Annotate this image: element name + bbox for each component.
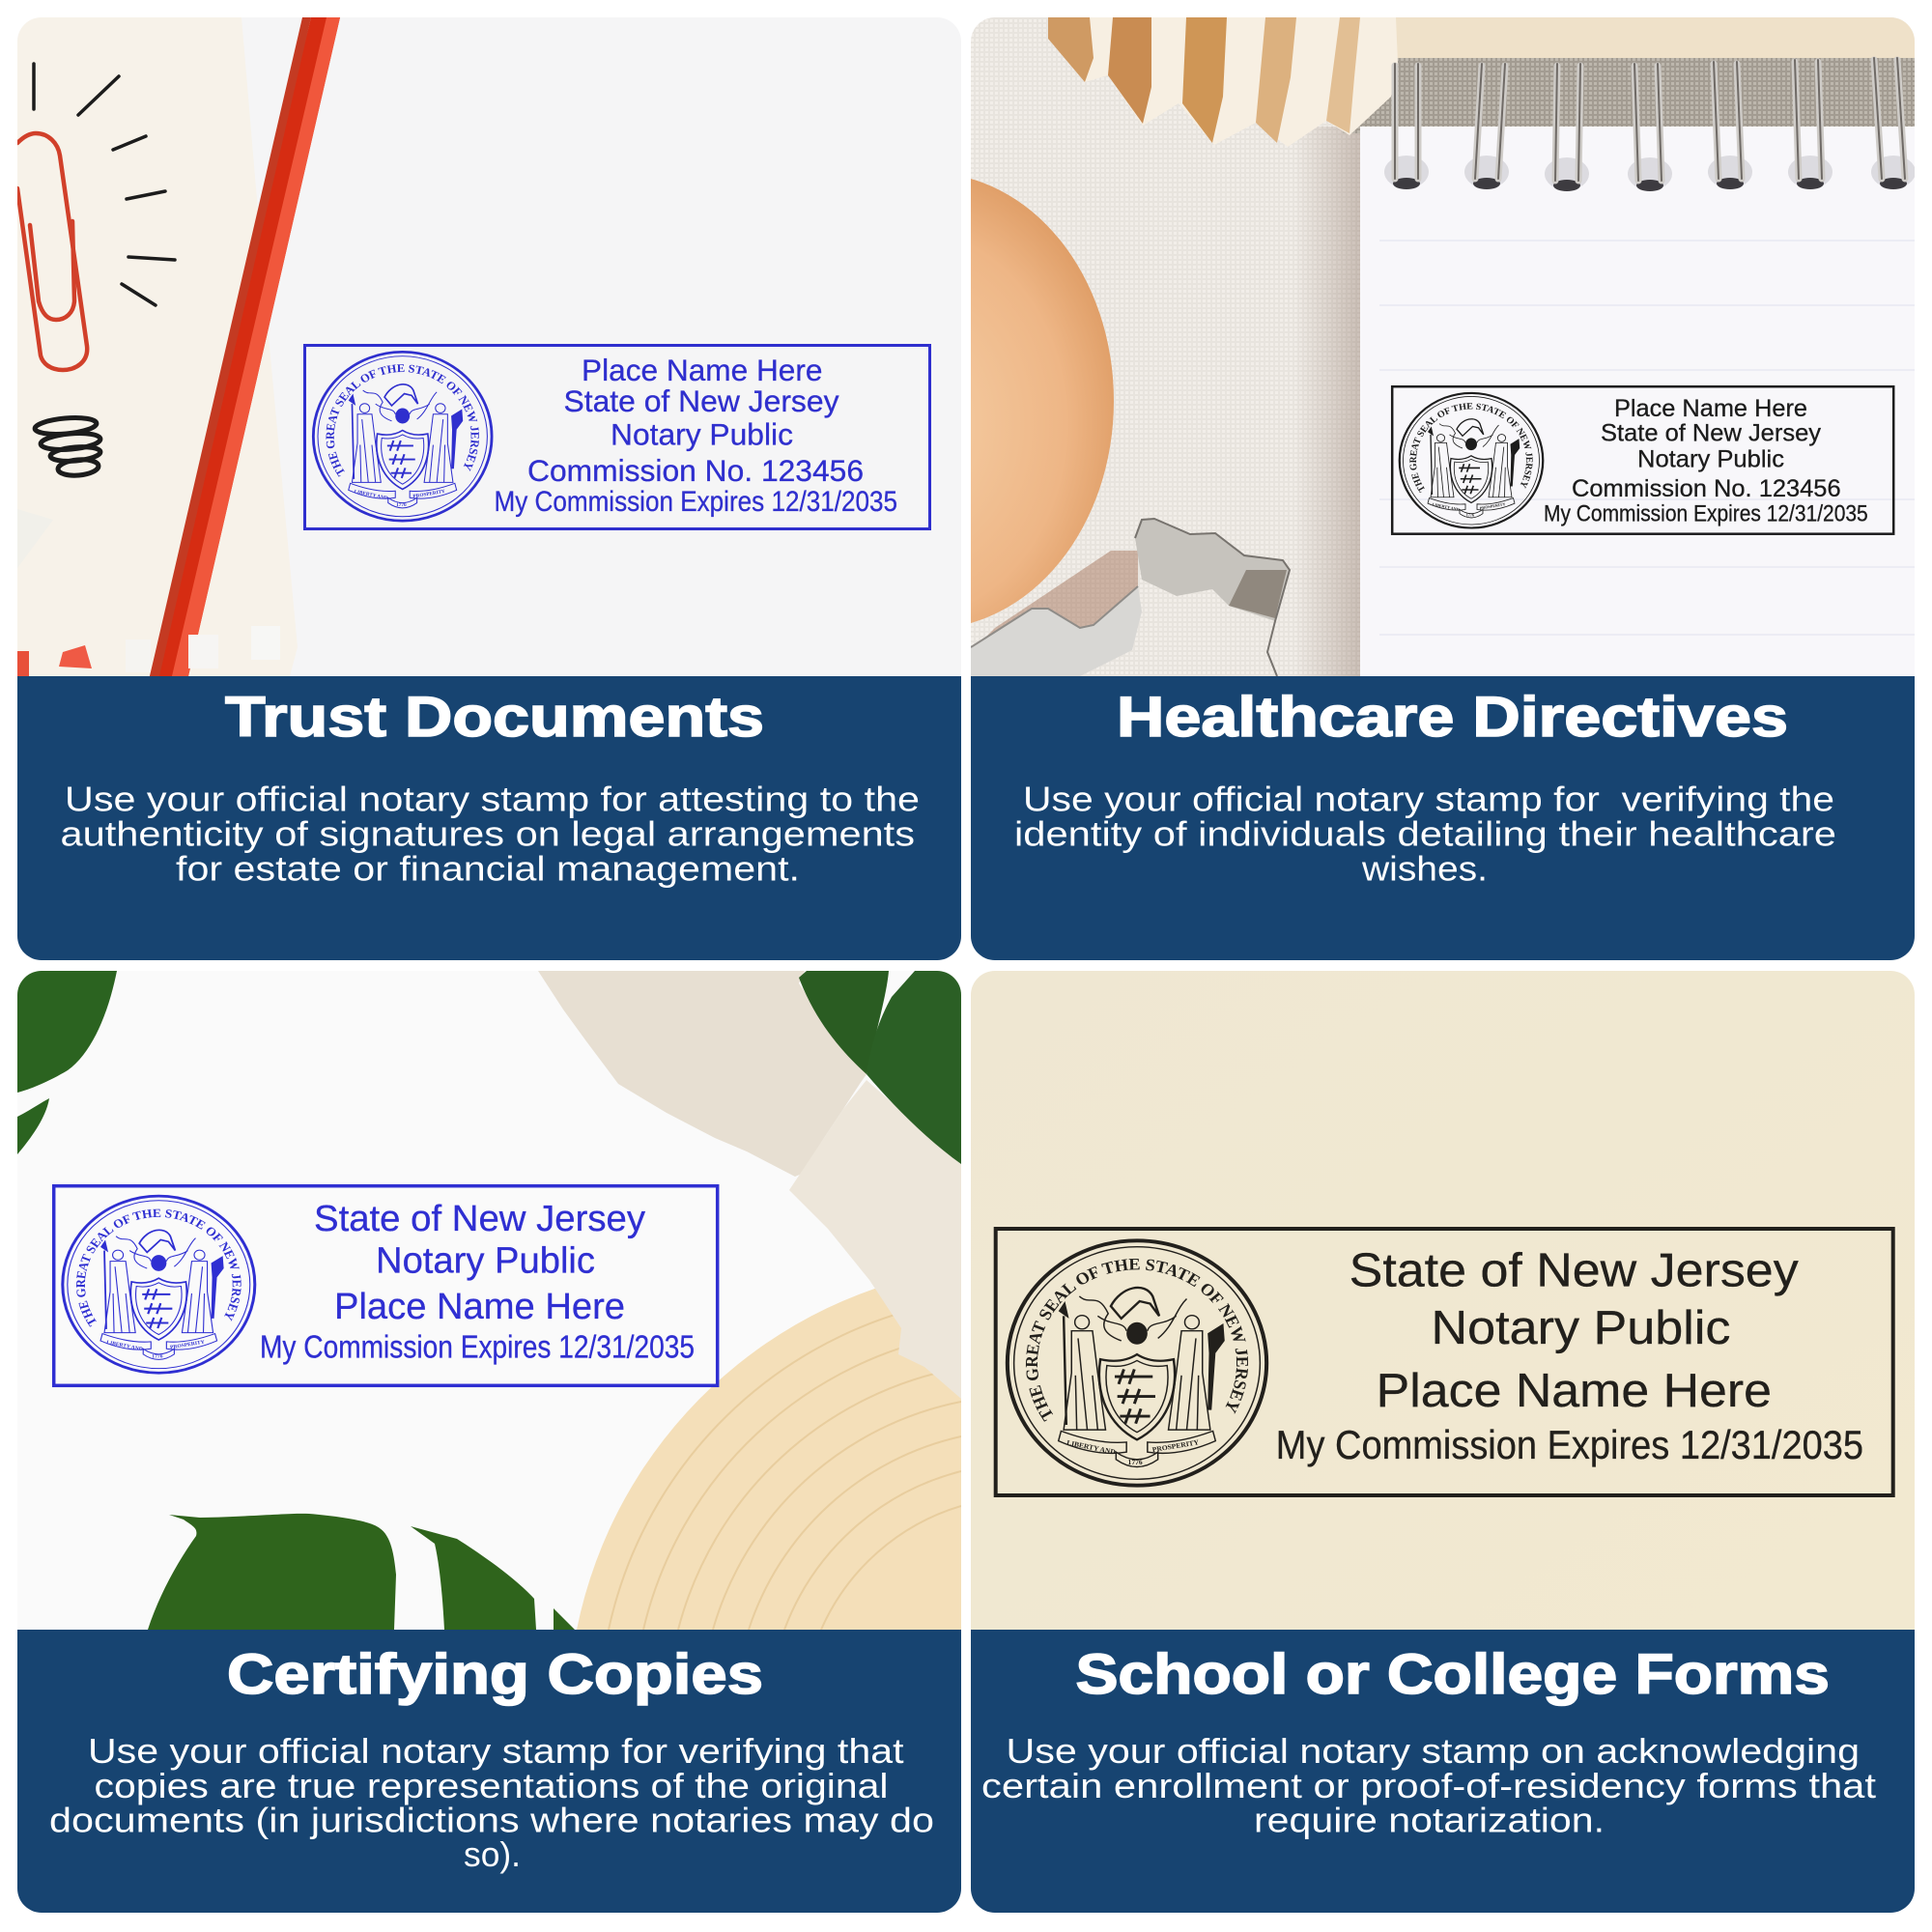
seal of New Jersey: 1776 [152,1354,163,1359]
stamp text: Notary Public [1432,1302,1731,1354]
icon: spiral rings [1384,58,1916,191]
description: require notarization. [1254,1801,1605,1839]
icon: notebook page [1360,127,1915,676]
panel: Healthcare Directives [971,17,1915,960]
description: documents (in jurisdictions where notaries may do [49,1801,934,1839]
stamp text: My Commission Expires 12/31/2035 [495,486,897,518]
photo: cream textured paper [971,971,1915,1630]
stamp text [260,1199,695,1365]
seal of New Jersey [1399,392,1544,529]
icon: wooden handle [1391,17,1915,58]
photo: leaves, linen cloth and straw hat [17,971,961,1630]
stamp impression: black New Jersey notary stamp [993,1227,1895,1497]
stamp text: My Commission Expires 12/31/2035 [1276,1422,1863,1467]
panel: School or College Forms [971,971,1915,1913]
description: Use your official notary stamp on acknowledging [1007,1731,1860,1771]
stamp text: Place Name Here [582,353,823,387]
heading: School or College Forms [1076,1643,1830,1706]
seal of New Jersey: LIBERTY AND [354,489,388,501]
stamp text: Place Name Here [1377,1365,1772,1417]
icon: honey dipper [1048,17,1398,147]
stamp text: Place Name Here [334,1287,625,1327]
seal of New Jersey: THE GREAT SEAL OF THE STATE OF NEW JERSEY [1026,1259,1248,1422]
caption band [17,1630,961,1913]
stamp impression: black New Jersey notary stamp [1391,384,1895,535]
stamp text [1276,1245,1863,1467]
heading: Trust Documents [225,686,764,749]
stamp text: Commission No. 123456 [1572,475,1841,502]
icon: paper clip [17,133,87,370]
seal of New Jersey: LIBERTY AND [1432,501,1460,512]
photo: paper, pencil and paper clip [17,17,961,676]
seal of New Jersey: LIBERTY AND [106,1340,143,1352]
linen stain near egg [985,551,1138,638]
seal of New Jersey [61,1194,257,1375]
icon: linen cloth [538,971,961,1399]
description: wishes. [1361,848,1488,889]
photo: linen, egg, honey dipper, notebook, cookie cutter [971,17,1915,676]
heading: Certifying Copies [227,1643,763,1706]
stamp text [495,353,897,518]
caption band [971,1630,1915,1913]
description: Use your official notary stamp for verifying the [1023,779,1834,819]
icon: hand-drawn light bulb rays and base [34,64,175,477]
seal of New Jersey: PROSPERITY [1479,501,1506,510]
seal of New Jersey: THE GREAT SEAL OF THE STATE OF NEW JERSEY [76,1209,242,1327]
icon: cookie cutter [971,519,1290,676]
description: for estate or financial management. [176,848,800,889]
icon: monstera leaves top left [17,971,117,1154]
description: identity of individuals detailing their healthcare [1014,813,1836,854]
stamp text: Notary Public [611,417,793,452]
seal of New Jersey: LIBERTY AND [1065,1438,1117,1456]
caption band [17,676,961,960]
seal of New Jersey: PROSPERITY [170,1340,205,1350]
seal of New Jersey [311,351,493,522]
icon: red pencil [150,17,340,676]
description: so). [464,1834,521,1874]
seal of New Jersey: 1776 [1466,513,1474,517]
stamp text: Place Name Here [1614,395,1807,422]
stamp impression: blue New Jersey notary stamp [303,344,931,530]
icon: egg [971,179,1114,623]
stamp text: My Commission Expires 12/31/2035 [1544,500,1868,527]
stamp text: Commission No. 123456 [527,453,864,488]
seal of New Jersey: PROSPERITY [412,489,446,499]
caption band [971,676,1915,960]
description: copies are true representations of the original [95,1766,888,1805]
seal of New Jersey: PROSPERITY [1151,1437,1200,1454]
seal of New Jersey: THE GREAT SEAL OF THE STATE OF NEW JERSEY [327,364,479,477]
stamp impression: blue New Jersey notary stamp [52,1184,719,1387]
heading: Healthcare Directives [1117,686,1788,749]
stamp text: State of New Jersey [314,1199,645,1239]
description: Use your official notary stamp for verifying that [88,1731,904,1771]
seal of New Jersey: 1776 [1128,1458,1143,1466]
stamp text: My Commission Expires 12/31/2035 [260,1329,695,1365]
seal of New Jersey: THE GREAT SEAL OF THE STATE OF NEW JERSEY [1409,403,1533,493]
stamp text [1544,395,1868,527]
description: authenticity of signatures on legal arrangements [60,813,915,854]
icon: monstera leaves bottom [148,1514,575,1630]
description [49,1731,934,1874]
panel: Trust Documents [17,17,961,960]
stamp text: State of New Jersey [1601,420,1821,447]
icon: straw hat [577,1267,961,1630]
stamp text: State of New Jersey [564,384,839,418]
icon: monstera leaves top right [799,971,961,1164]
description [1016,786,1835,881]
icon: grey cloth behind notebook [1343,56,1915,133]
torn paper perforations [17,626,280,676]
description: certain enrollment or proof-of-residency forms that [981,1766,1876,1805]
seal of New Jersey: 1776 [396,502,407,508]
description [981,1731,1876,1839]
description: Use your official notary stamp for attesting to the [65,779,920,819]
stamp text: State of New Jersey [1350,1245,1799,1297]
panel: Certifying Copies [17,971,961,1913]
stamp text: Notary Public [1637,445,1784,472]
stamp text: Notary Public [376,1241,595,1282]
seal of New Jersey [1005,1238,1269,1488]
description [60,779,920,889]
